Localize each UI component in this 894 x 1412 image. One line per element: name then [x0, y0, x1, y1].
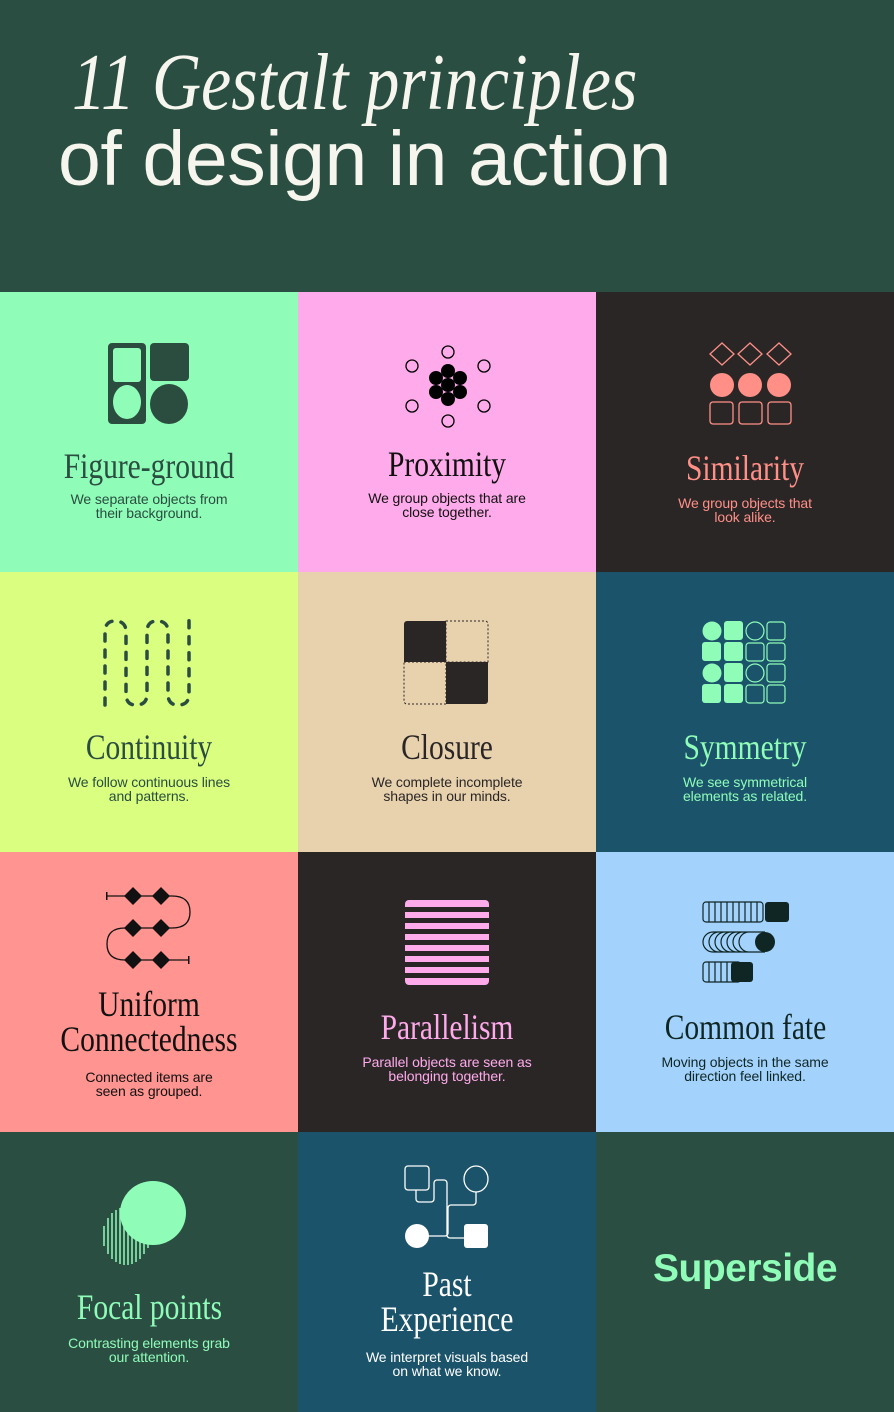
text: We group objects that [678, 495, 812, 511]
panel: parallelism [298, 852, 596, 1132]
text [85, 1069, 213, 1099]
panel: focal points [0, 1132, 298, 1412]
icon: figure-ground [108, 343, 189, 424]
panel: continuity [0, 572, 298, 852]
heading: Experience [381, 1299, 513, 1339]
heading: Closure [401, 727, 493, 767]
text: their background. [96, 505, 202, 521]
text [68, 774, 230, 804]
text: look alike. [714, 509, 776, 525]
text: elements as related. [683, 788, 807, 804]
icon: parallel lines [405, 900, 489, 985]
icon: proximity dots [405, 345, 491, 428]
text [362, 1054, 532, 1084]
text: close together. [402, 504, 492, 520]
text: and patterns. [109, 788, 189, 804]
heading: Similarity [686, 448, 804, 488]
logo: Superside: Superside [653, 1247, 837, 1290]
text [68, 1335, 230, 1365]
heading: Continuity [86, 727, 212, 767]
heading: Connectedness [60, 1019, 238, 1059]
heading: Common fate [664, 1007, 826, 1047]
panel: uniform connectedness [0, 852, 298, 1132]
panel: logo [596, 1132, 894, 1412]
text [70, 491, 227, 521]
text: We group objects that are [368, 490, 526, 506]
text: Parallel objects are seen as [362, 1054, 532, 1070]
panel: symmetry [596, 572, 894, 852]
text: direction feel linked. [684, 1068, 806, 1084]
panel: closure [298, 572, 596, 852]
title line 2: of design in action [58, 116, 671, 202]
text [368, 490, 526, 520]
text [678, 495, 812, 525]
text: Connected items are [85, 1069, 213, 1085]
icon: connected shapes [404, 1165, 489, 1248]
text: our attention. [109, 1349, 189, 1365]
heading: Proximity [388, 444, 506, 484]
text [366, 1349, 528, 1379]
text: We see symmetrical [683, 774, 807, 790]
panel: similarity [596, 292, 894, 572]
heading [381, 1264, 513, 1339]
text: Moving objects in the same [661, 1054, 829, 1070]
text: belonging together. [388, 1068, 506, 1084]
text: shapes in our minds. [383, 788, 511, 804]
text [661, 1054, 829, 1084]
heading: Parallelism [381, 1007, 513, 1047]
text: We complete incomplete [372, 774, 522, 790]
heading: Symmetry [684, 727, 806, 767]
heading: Figure-ground [64, 446, 234, 486]
text: We follow continuous lines [68, 774, 230, 790]
panel: past experience [298, 1132, 596, 1412]
icon: dashed continuous line [103, 619, 191, 707]
icon: symmetry grid [702, 621, 786, 704]
text: We interpret visuals based [366, 1349, 528, 1365]
heading: Past [422, 1264, 472, 1304]
icon: similarity [709, 342, 792, 425]
title line 1: 11 Gestalt principles [72, 39, 637, 127]
panel: figure-ground [0, 292, 298, 572]
text: seen as grouped. [96, 1083, 202, 1099]
panel: proximity [298, 292, 596, 572]
header [0, 0, 894, 292]
text [683, 774, 807, 804]
heading [60, 984, 238, 1059]
text: We separate objects from [71, 491, 227, 507]
text [372, 774, 522, 804]
icon: focal circles [103, 1181, 186, 1265]
panel: common fate [596, 852, 894, 1132]
text: on what we know. [393, 1363, 501, 1379]
heading: Focal points [76, 1287, 222, 1327]
icon: connected diamonds [106, 887, 191, 969]
icon: closure squares [404, 620, 488, 704]
icon: moving shapes [702, 901, 789, 983]
heading: Uniform [98, 984, 200, 1024]
text: Contrasting elements grab [68, 1335, 230, 1351]
